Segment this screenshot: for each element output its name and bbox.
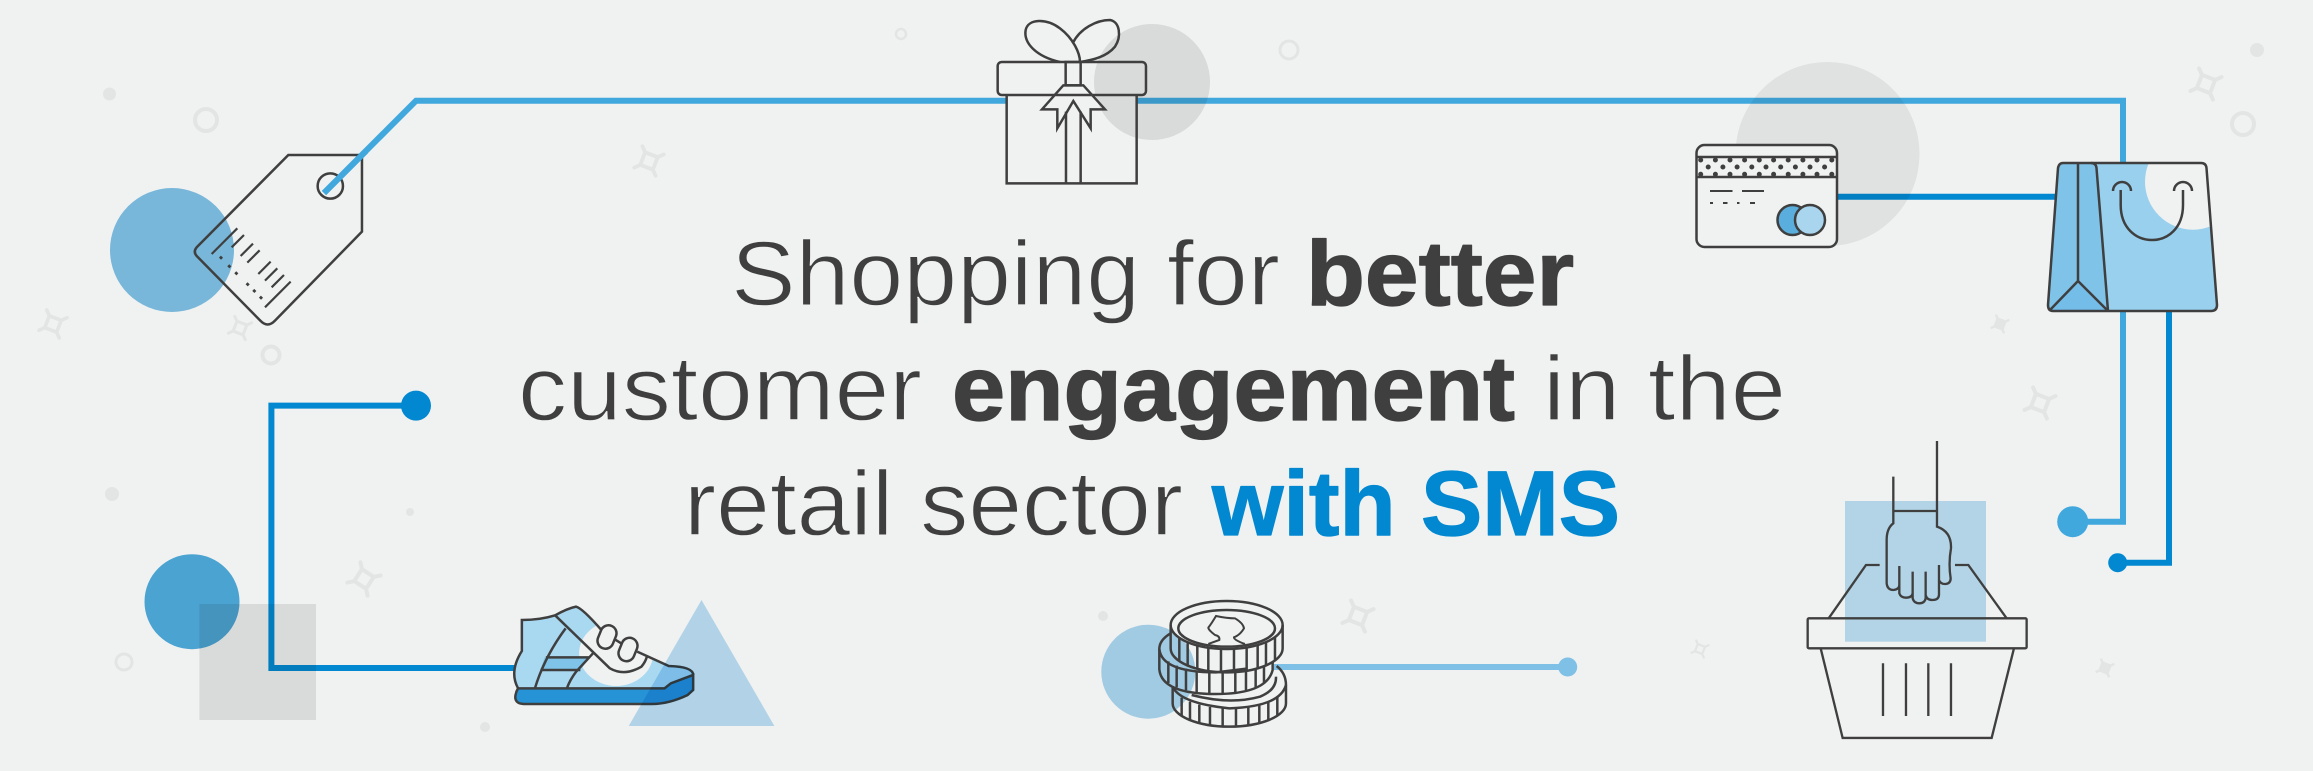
- blue circle behind coins: [1101, 625, 1195, 719]
- grey circle behind gift: [1094, 24, 1210, 140]
- blue triangle behind sneaker: [629, 600, 774, 726]
- dark blue connector line: card to bag, bag to dot: [1837, 197, 2169, 572]
- icon: gift box: [998, 20, 1146, 183]
- title: Shopping for: [731, 223, 1280, 325]
- title: customer: [518, 338, 922, 440]
- icon: coin stack: [1159, 601, 1286, 727]
- icon: price tag: [195, 151, 366, 324]
- icon: shopping basket with hand: [1808, 441, 2027, 738]
- dark blue connector line: dot to shoe: [271, 391, 515, 668]
- blue square behind basket: [1845, 501, 1986, 642]
- basket: [1808, 565, 2027, 738]
- blue connector line: price tag to shopping bag to dot: [324, 101, 2123, 537]
- bottom coin: [1173, 666, 1286, 727]
- icon: shopping bag: [2046, 162, 2218, 312]
- title: [518, 223, 1786, 555]
- title: retail sector: [684, 453, 1183, 555]
- blue circle behind price tag: [110, 188, 234, 312]
- blue circle by shoe line: [144, 554, 240, 649]
- title: engagement: [952, 338, 1515, 440]
- sneaker strap buckles: [595, 623, 640, 664]
- title: in the: [1543, 338, 1786, 440]
- top coin: [1171, 601, 1283, 672]
- icon: credit card: [1696, 145, 1837, 247]
- grey square by shoe line: [199, 604, 316, 720]
- icon: sneaker: [514, 607, 693, 704]
- grey circle behind credit card: [1736, 62, 1920, 246]
- middle coin: [1159, 633, 1273, 694]
- hand: [1887, 441, 1951, 603]
- title: better: [1306, 223, 1574, 325]
- light blue connector line: coins to dot: [1274, 658, 1577, 676]
- title: with SMS: [1211, 453, 1620, 555]
